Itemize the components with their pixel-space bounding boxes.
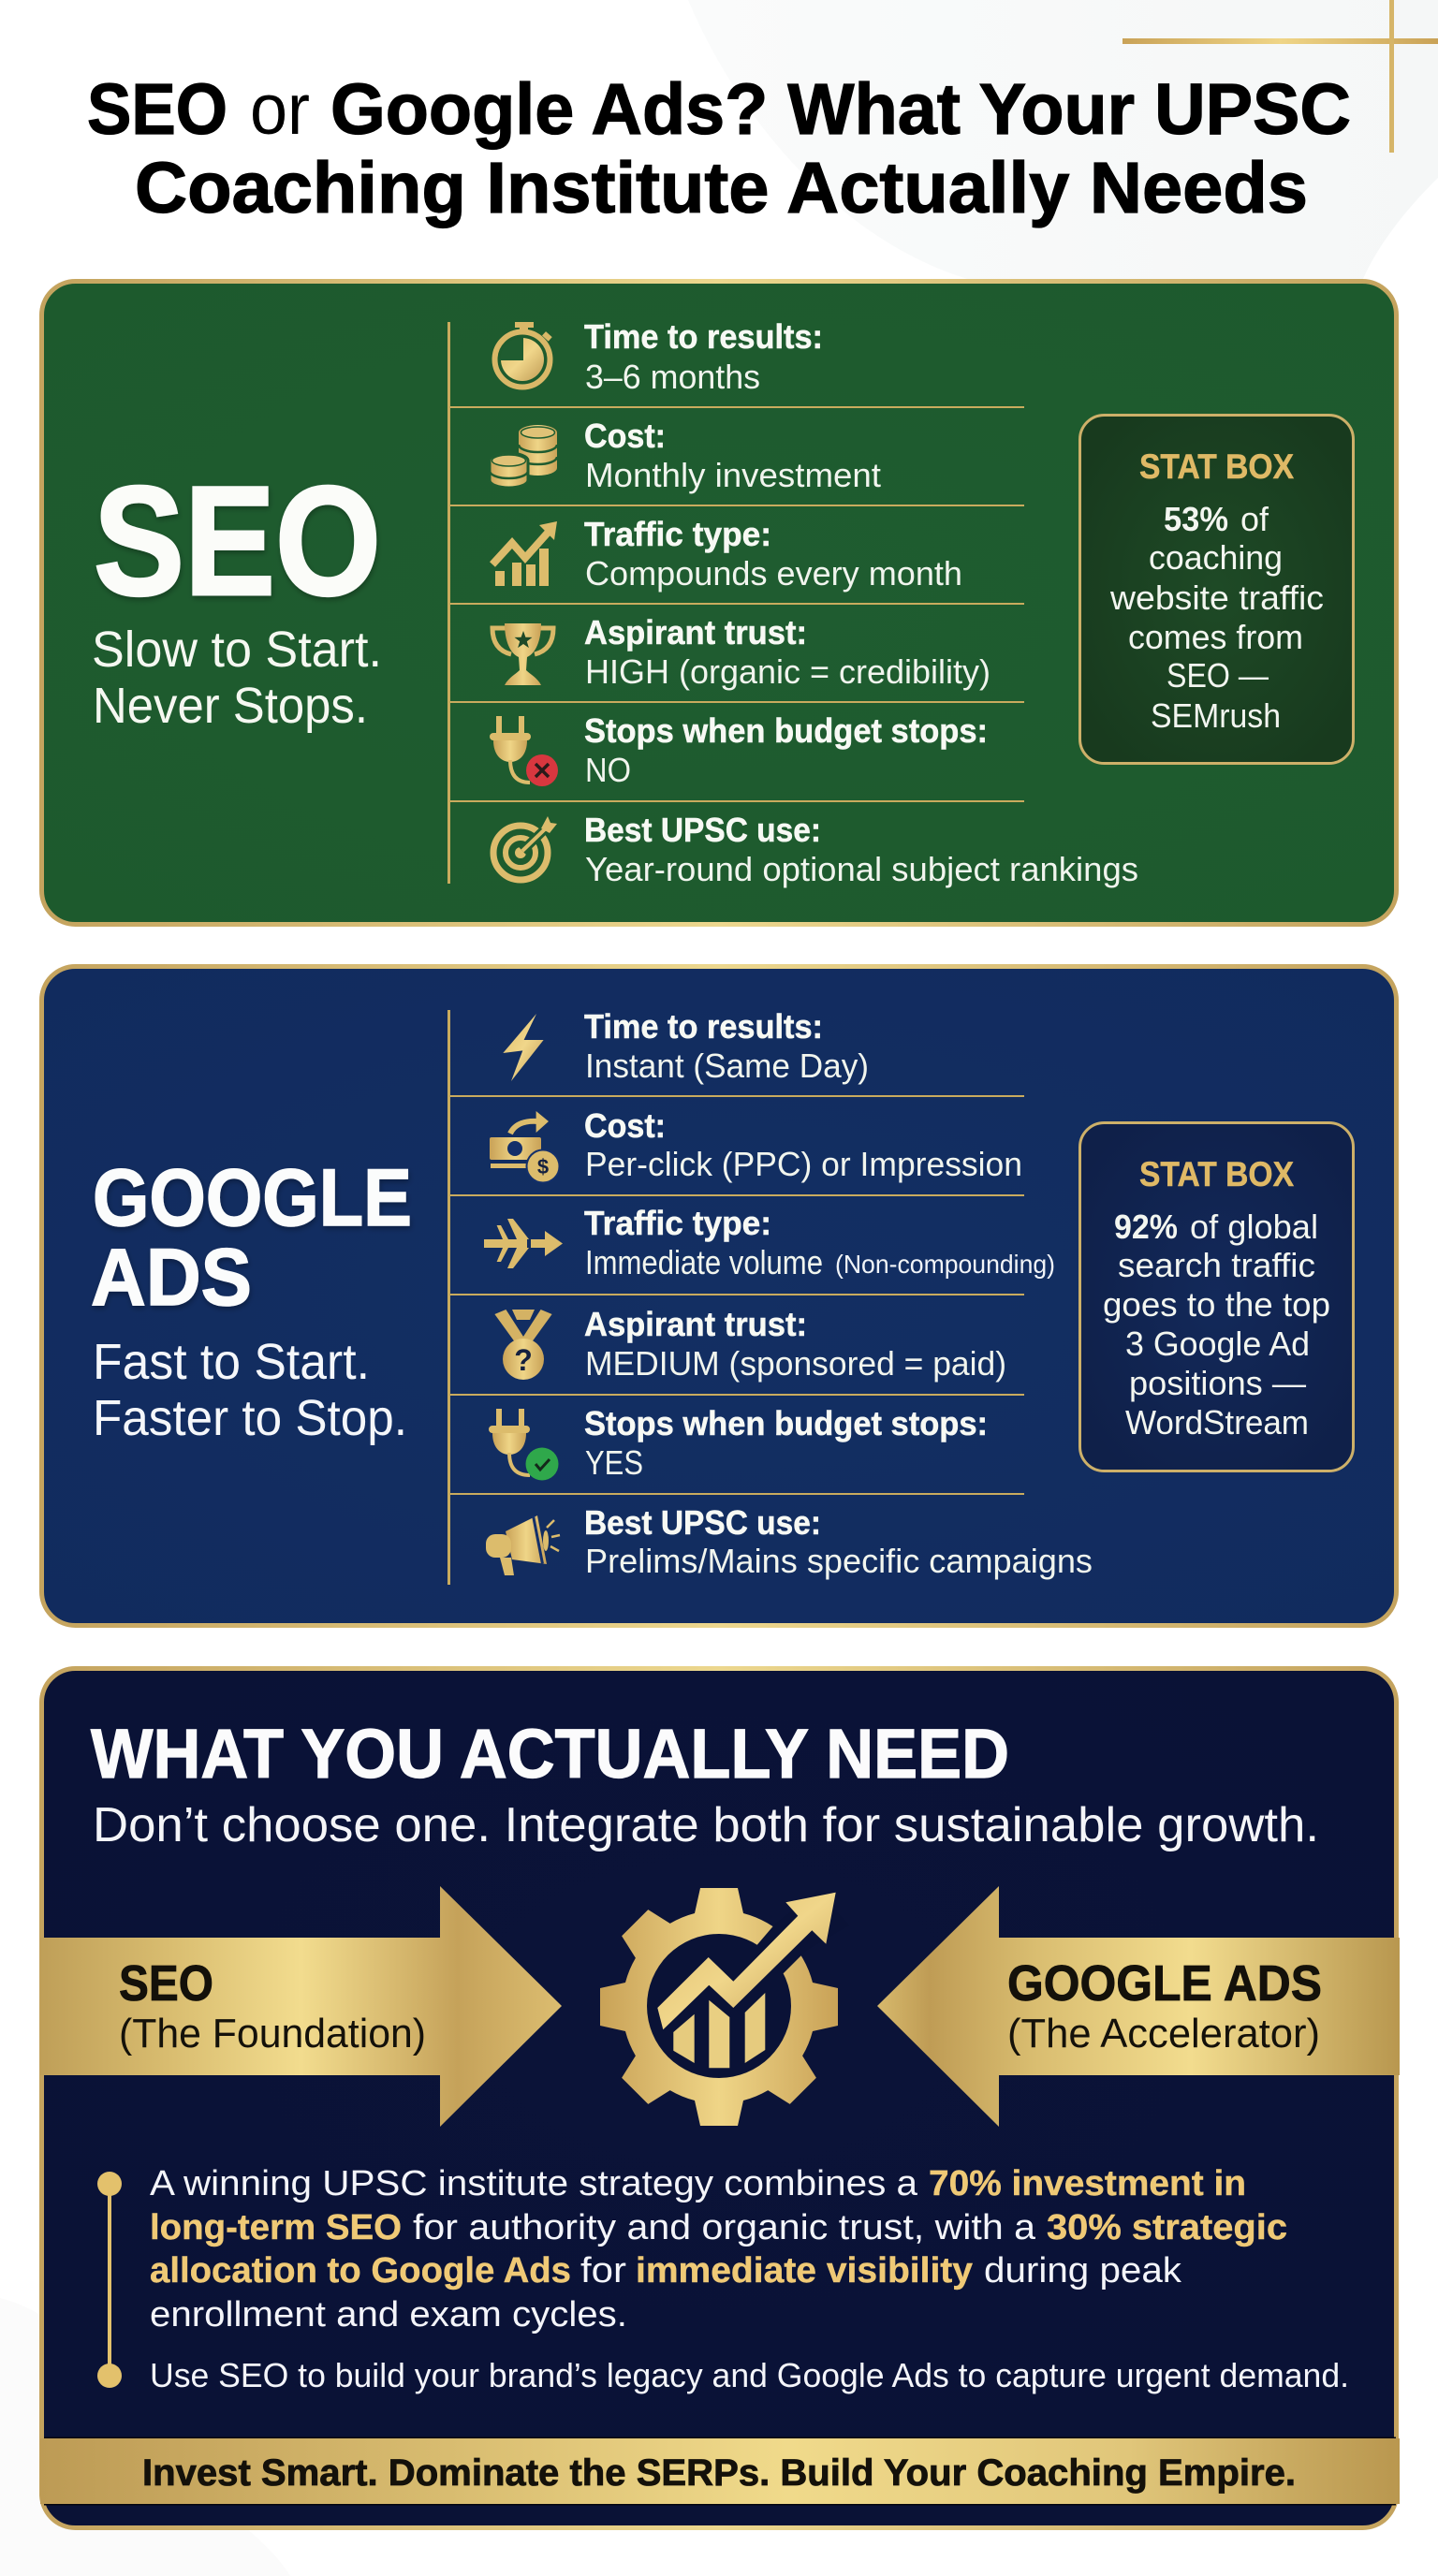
- strategy paragraph: for: [580, 2251, 626, 2291]
- stat box: SEO: coaching: [1149, 538, 1283, 577]
- icon: gear with growth chart: [600, 1888, 849, 2126]
- row: best UPSC use: [493, 811, 1138, 888]
- row: time to results: [494, 317, 823, 396]
- Google Ads tagline: Faster to Stop.: [93, 1390, 407, 1446]
- arrow: SEO: [40, 1886, 562, 2127]
- stat box: SEO: SEO —: [1167, 656, 1269, 695]
- row: cost: [490, 1106, 1022, 1183]
- Google Ads tagline: [93, 1334, 407, 1446]
- icon: plug with check: [489, 1409, 558, 1481]
- icon: stopwatch: [494, 322, 552, 388]
- arrow: SEO: SEO: [119, 1955, 213, 2012]
- subheading: Don’t choose one. Integrate both for sustainable growth.: [93, 1798, 1319, 1852]
- stat box: SEO: 53%: [1164, 500, 1228, 538]
- strategy paragraph: for authority and organic trust, with a: [413, 2208, 1036, 2247]
- row: best UPSC use: Prelims/Mains specific campaigns: [585, 1542, 1093, 1580]
- panel: SEO: [41, 281, 1397, 925]
- row: best UPSC use: Year-round optional subject rankings: [585, 850, 1138, 888]
- row: stops when budget stops: Stops when budget stops:: [584, 711, 988, 750]
- row: cost: Cost:: [584, 417, 666, 455]
- arrow: Google Ads: (The Accelerator): [1007, 2011, 1320, 2056]
- stat box: SEO: comes from: [1128, 618, 1303, 656]
- title: Google Ads? What Your UPSC: [330, 69, 1351, 150]
- strategy paragraph: 70% investment in: [929, 2164, 1246, 2203]
- stat box: SEO: STAT BOX: [1139, 447, 1294, 486]
- call to action bar: Invest Smart. Dominate the SERPs. Build Your Coaching Empire.: [142, 2452, 1296, 2494]
- corner gold lines: [1123, 0, 1438, 153]
- row: stops when budget stops: YES: [585, 1443, 643, 1482]
- icon: trophy: [492, 623, 553, 685]
- row: traffic type: Compounds every month: [585, 554, 962, 593]
- strategy paragraph: 30% strategic: [1047, 2208, 1287, 2247]
- row: aspirant trust: Aspirant trust:: [584, 1305, 807, 1343]
- row: aspirant trust: Aspirant trust:: [584, 613, 807, 651]
- arrow: Google Ads: [877, 1886, 1400, 2127]
- stat box: Google Ads: 92%: [1114, 1208, 1178, 1246]
- strategy paragraph: immediate visibility: [636, 2251, 973, 2291]
- stat box: SEO: website traffic: [1109, 578, 1324, 617]
- SEO heading: SEO: [94, 455, 381, 628]
- icon: money and coin: [490, 1111, 560, 1183]
- call to action bar: [40, 2437, 1400, 2505]
- row: time to results: Instant (Same Day): [585, 1046, 869, 1085]
- stat box: Google Ads: positions —: [1129, 1364, 1306, 1402]
- row: cost: Per-click (PPC) or Impression: [585, 1145, 1022, 1183]
- arrow: SEO: (The Foundation): [119, 2011, 426, 2056]
- heading: WHAT YOU ACTUALLY NEED: [91, 1715, 1009, 1793]
- strategy paragraph: enrollment and exam cycles.: [150, 2295, 627, 2334]
- Google Ads tagline: Fast to Start.: [93, 1334, 370, 1390]
- panel: what you actually need: [40, 1668, 1400, 2527]
- row: aspirant trust: HIGH (organic = credibility): [585, 652, 990, 691]
- row: time to results: Time to results:: [584, 317, 823, 356]
- row: time to results: [503, 1007, 869, 1085]
- row: traffic type: [492, 515, 962, 593]
- row: traffic type: Immediate volume: [585, 1243, 823, 1281]
- closing line: Use SEO to build your brand’s legacy and Google Ads to capture urgent demand.: [150, 2356, 1349, 2394]
- row: time to results: Time to results:: [584, 1007, 823, 1046]
- Google Ads heading: ADS: [91, 1233, 252, 1323]
- SEO tagline: Slow to Start.: [92, 622, 382, 678]
- arrow: Google Ads: GOOGLE ADS: [1007, 1955, 1322, 2012]
- row: aspirant trust: MEDIUM (sponsored = paid): [585, 1344, 1006, 1383]
- row: best UPSC use: Best UPSC use:: [584, 811, 821, 849]
- stat box: Google Ads: WordStream: [1125, 1403, 1309, 1442]
- icon: money and coin: $: [537, 1155, 549, 1178]
- stat box: Google Ads: STAT BOX: [1139, 1155, 1294, 1193]
- row: time to results: 3–6 months: [585, 358, 760, 396]
- panel: Google Ads: [41, 966, 1397, 1625]
- title: SEO: [87, 69, 227, 150]
- row: cost: Cost:: [584, 1106, 666, 1145]
- Google Ads heading: [91, 1153, 412, 1323]
- row: cost: [490, 417, 881, 494]
- icon: medal: ?: [514, 1343, 533, 1377]
- stat box: Google Ads: search traffic: [1118, 1246, 1315, 1284]
- icon: lightning bolt: [503, 1014, 544, 1081]
- title: or: [250, 69, 310, 150]
- row: traffic type: [484, 1204, 1055, 1281]
- stat box: SEO: SEMrush: [1151, 696, 1281, 735]
- stat box: Google Ads: of global: [1190, 1208, 1318, 1246]
- row: cost: Monthly investment: [585, 456, 881, 494]
- icon: plug with cross: [490, 716, 558, 786]
- stat box: SEO: of: [1240, 500, 1269, 538]
- row: aspirant trust: [494, 1305, 1006, 1383]
- row: best UPSC use: [486, 1503, 1093, 1580]
- comparison dividers: [448, 1010, 1024, 1585]
- SEO tagline: Never Stops.: [93, 678, 368, 734]
- icon: plane and arrow: [484, 1219, 563, 1268]
- strategy paragraph: during peak: [984, 2251, 1182, 2291]
- stat box: Google Ads: goes to the top: [1103, 1285, 1330, 1324]
- strategy paragraph: A winning UPSC institute strategy combines a: [150, 2164, 918, 2203]
- title: Coaching Institute Actually Needs: [135, 148, 1308, 228]
- timeline: [97, 2172, 122, 2388]
- row: stops when budget stops: Stops when budget stops:: [584, 1404, 988, 1442]
- row: aspirant trust: [492, 613, 990, 691]
- row: stops when budget stops: [489, 1404, 988, 1482]
- icon: target: [493, 816, 557, 880]
- icon: megaphone: [486, 1515, 560, 1575]
- stat box: Google Ads: [1080, 1123, 1354, 1471]
- strategy paragraph: allocation to Google Ads: [150, 2251, 571, 2291]
- row: traffic type: Traffic type:: [584, 1204, 771, 1242]
- row: best UPSC use: Best UPSC use:: [584, 1503, 821, 1542]
- icon: medal: [494, 1310, 552, 1380]
- SEO tagline: [92, 622, 382, 734]
- Google Ads heading: GOOGLE: [93, 1153, 412, 1243]
- strategy paragraph: [150, 2164, 1287, 2334]
- stat box: Google Ads: 3 Google Ad: [1125, 1325, 1310, 1363]
- strategy paragraph: long-term SEO: [150, 2208, 402, 2247]
- icon: coins: [490, 425, 557, 488]
- icon: growth chart: [492, 521, 557, 586]
- row: stops when budget stops: NO: [585, 751, 631, 789]
- row: traffic type: (Non-compounding): [835, 1250, 1055, 1279]
- comparison dividers: [448, 322, 1024, 884]
- stat box: SEO: [1080, 416, 1354, 764]
- row: traffic type: Traffic type:: [584, 515, 771, 553]
- row: stops when budget stops: [490, 711, 988, 789]
- title: [87, 69, 1351, 228]
